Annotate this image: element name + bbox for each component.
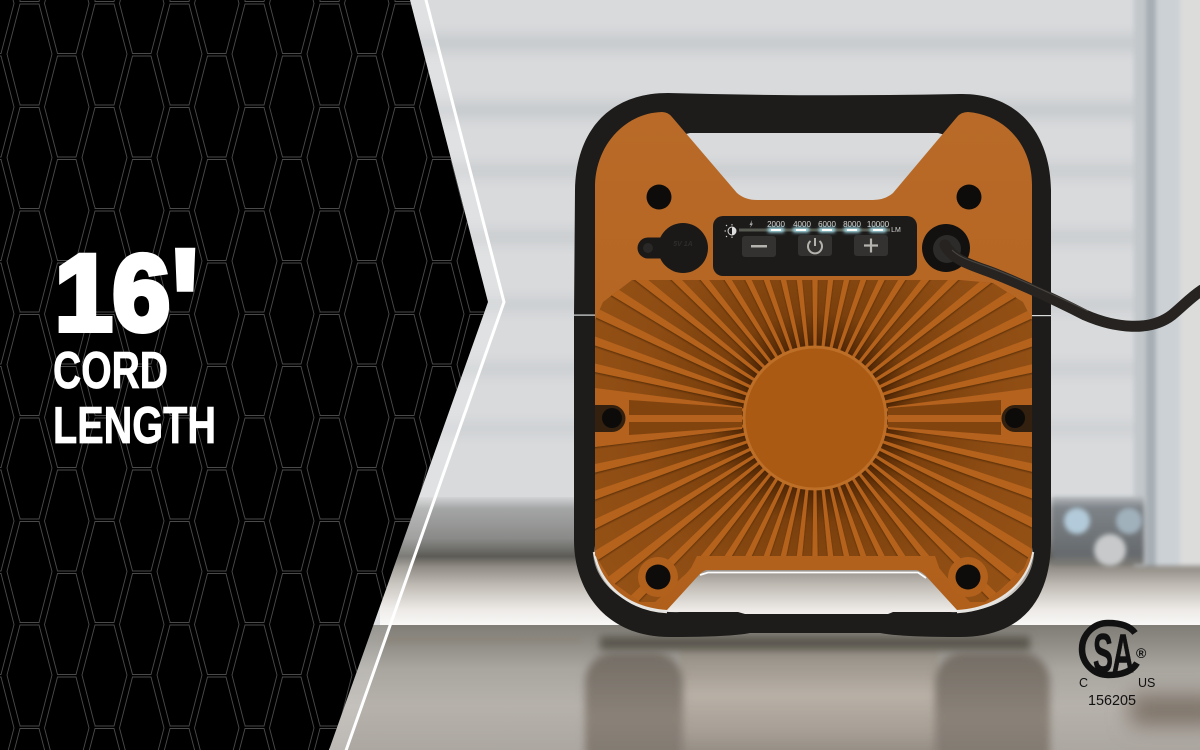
power button (798, 235, 832, 256)
16 foot number (55, 214, 201, 399)
dark area right of the device (1052, 497, 1144, 565)
icon: bolt (750, 220, 753, 228)
lumen scale: 6000 (818, 220, 836, 229)
16 foot number: ' (169, 214, 201, 399)
radial fins (595, 280, 1032, 602)
side mounting bays (595, 388, 1032, 447)
out-of-focus lights (1064, 508, 1142, 566)
letter C ring (1082, 623, 1137, 675)
cord length label: CORD (53, 342, 168, 400)
icon: brightness (724, 224, 736, 238)
registered mark: ® (1136, 645, 1147, 661)
LED bar (739, 228, 890, 232)
SA letters: A (1112, 622, 1134, 684)
window frame at right (1134, 0, 1200, 566)
C and US: C (1079, 676, 1088, 690)
power cord (945, 245, 1200, 326)
dark band and window sill (380, 497, 1200, 626)
window blinds (400, 36, 1160, 432)
cord length label: LENGTH (53, 397, 216, 455)
work light device (574, 93, 1200, 637)
plus button (854, 235, 888, 256)
SA letters: S (1093, 622, 1113, 684)
USB port cap: 5V 1A (673, 241, 693, 248)
16 foot number: 16 (55, 232, 170, 353)
orange plate (595, 112, 1032, 610)
lumen scale (767, 220, 901, 234)
C and US: US (1138, 676, 1155, 690)
control panel (713, 216, 917, 276)
cord grommet (922, 224, 970, 272)
frame seam (574, 314, 1051, 316)
centre disc (744, 347, 886, 489)
screws (646, 184, 982, 590)
floor reflection of the device (380, 636, 1200, 750)
white chevron line (346, 0, 504, 750)
lumen scale: 8000 (843, 220, 861, 229)
certificate number: 156205 (1088, 692, 1136, 709)
frosted chevron band (329, 0, 505, 750)
C and US (1079, 676, 1155, 690)
cord length label (53, 342, 216, 455)
lumen scale: 4000 (793, 220, 811, 229)
fin ribs (595, 280, 1032, 602)
black rubber frame (574, 93, 1051, 637)
headline (53, 214, 216, 455)
screw pads (638, 556, 988, 597)
CSA certification mark (1079, 622, 1155, 709)
lumen scale: 2000 (767, 220, 785, 229)
lower corner light gaps (594, 552, 1033, 612)
honeycomb pattern (0, 0, 500, 750)
black hexagon panel (0, 0, 500, 750)
lumen scale: LM (891, 227, 901, 234)
USB port cap (638, 223, 708, 273)
lumen scale: 10000 (867, 220, 890, 229)
fin grooves (590, 275, 1040, 610)
lower opening highlight (700, 572, 926, 578)
minus button (742, 236, 776, 257)
floor (330, 625, 1200, 750)
